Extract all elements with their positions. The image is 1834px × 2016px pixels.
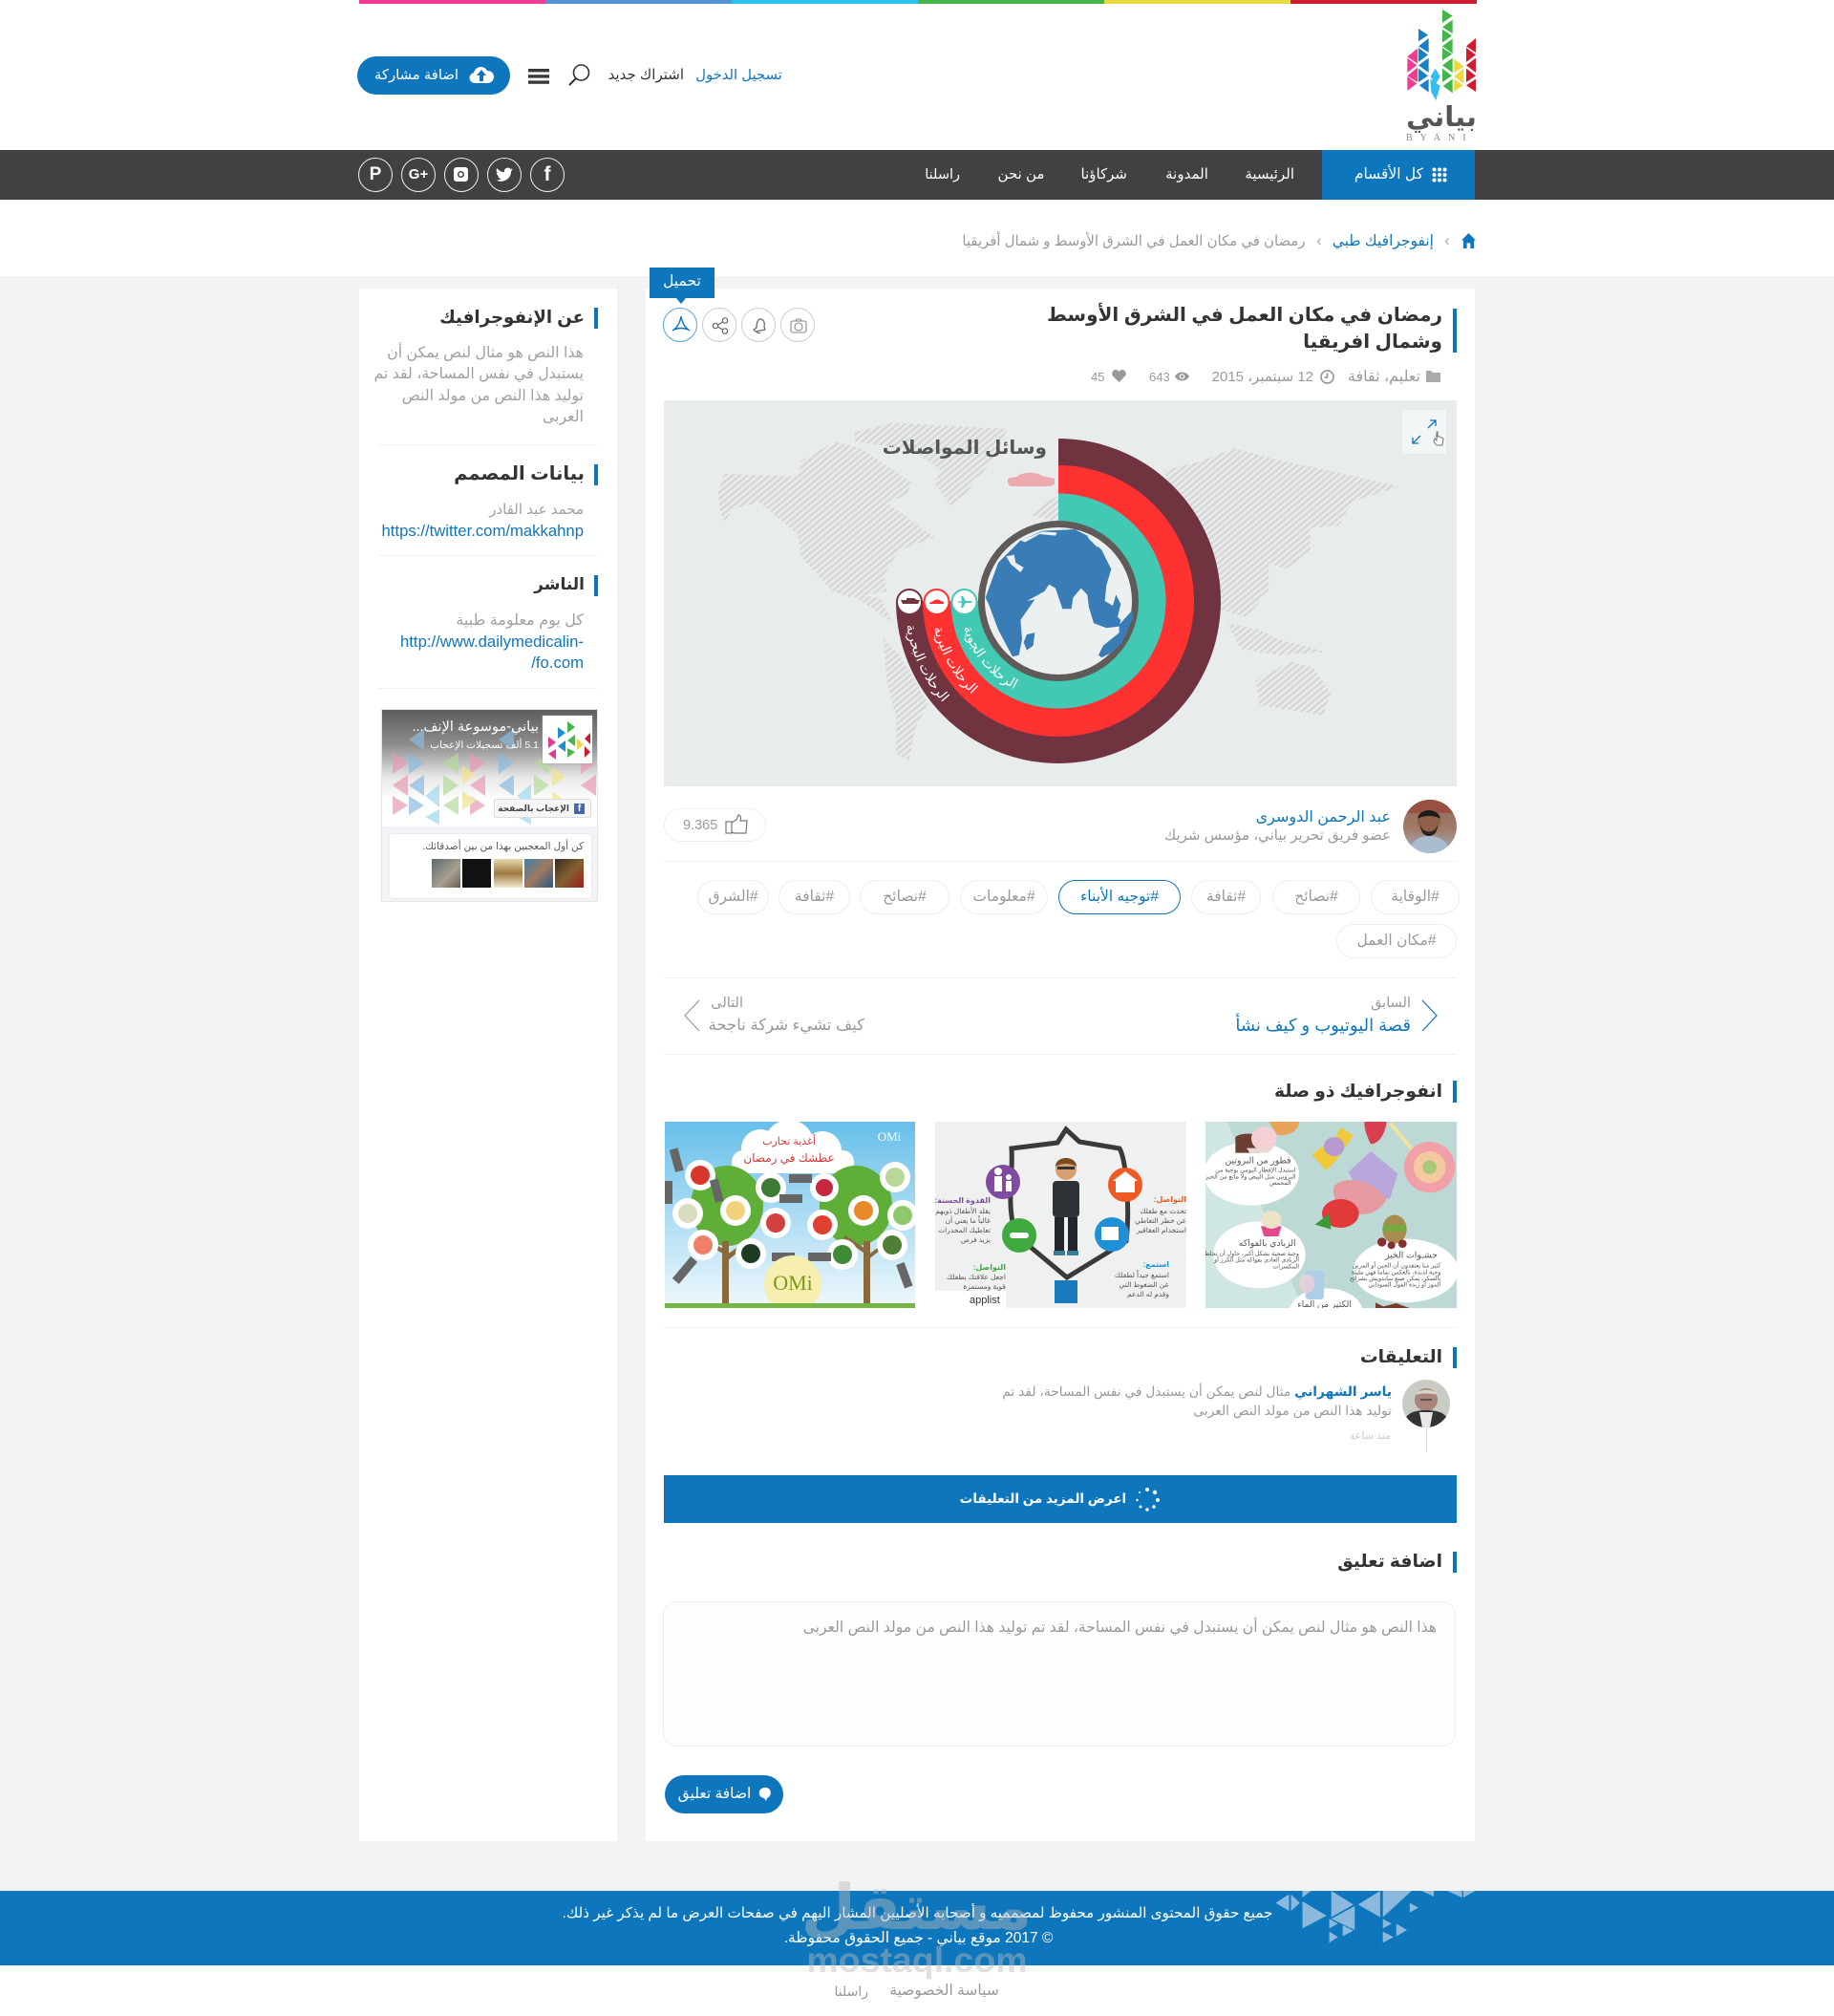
add comment button [665,1775,783,1813]
watermark latin word: mostaql.com [806,1940,1028,1980]
author block [664,800,1457,853]
about text: توليد هذا النص من مولد النص [402,388,584,404]
download tooltip [650,268,714,304]
thumbnail: foods fighting thirst [665,1122,915,1308]
tags [697,880,1460,958]
icon: grid [1433,168,1446,182]
thumbnail: healthy ramadan snacks: بالسكر، يمكن صنع ساندويش بشرائح [1350,1276,1441,1282]
thumbnail: teen protection: تعاطيك المخدرات [938,1226,991,1234]
icon: google plus: G+ [409,166,428,182]
about text [373,342,584,425]
globe [978,521,1139,681]
thumbnail: healthy ramadan snacks: البروتين مثل البيض ولا مانع من الخبز [1205,1173,1296,1180]
comment time: منذ ساعة [1350,1430,1391,1442]
footer link: privacy: سياسة الخصوصية [889,1983,999,1999]
likes count: 45 [1091,370,1104,384]
facebook widget [381,709,598,902]
icon: speech bubble [758,1787,771,1801]
breadcrumb category link: إنفوجرافيك طبي [1333,233,1434,249]
textarea placeholder: هذا النص هو مثال لنص يمكن أن يستبدل في نفس المساحة، لقد تم توليد هذا النص من مولد النص العربى [803,1619,1437,1636]
icon: right chevron [1421,999,1438,1032]
tag: highlighted [1058,880,1181,914]
copyright line: جميع حقوق المحتوى المنشور محفوظ لمصمميه و أصحابه الأصليين المشار اليهم في صفحات العرض ما لم يذكر غير ذلك. [563,1905,1272,1921]
footer link: contact: راسلنا [834,1984,868,1999]
tag: #الوقاية [1391,889,1439,905]
navigation bar [0,150,1834,200]
tag [860,880,949,914]
tag [778,880,850,914]
icon: menu [528,69,549,84]
thumbnail: teen protection: تحدث مع طفلك [1140,1207,1186,1215]
breadcrumb current page: رمضان في مكان العمل في الشرق الأوسط و شمال أفريقيا [962,234,1306,249]
login link: تسجيل الدخول [695,68,782,83]
article title: وشمال افريقيا [1303,332,1442,353]
heading: about infographic: عن الإنفوجرافيك [439,308,585,327]
thumbnail: teen protection: التواصل: [973,1263,1006,1272]
about text: العربى [543,409,584,425]
previous / next navigation [684,996,1438,1036]
designer link: https://twitter.com/makkahnp [382,522,584,540]
thumbnail: teen protection: يزيد فرص [961,1235,991,1244]
heading accent [594,464,598,485]
views count: 643 [1149,370,1170,384]
breadcrumb chevron: ‹ [1316,231,1322,249]
cap: ship [897,590,922,614]
tag: #ثقافة [1206,889,1246,905]
button label: اضافة تعليق [678,1786,751,1802]
commenter avatar [1402,1380,1450,1427]
facebook cover image [382,710,598,826]
icon: heart [1112,370,1126,382]
cap: car [925,590,949,614]
next caption: التالى [711,996,743,1011]
icon: share [702,308,736,342]
publisher link: /fo.com [531,654,584,672]
publisher link [400,633,584,672]
publisher name: كل يوم معلومة طبية [456,612,584,629]
label: land trips: الرحلات البرية [933,628,978,694]
icon: pdf download [663,308,697,342]
heading accent [594,575,598,596]
facebook like button: f [578,804,581,814]
thumbnail: teen protection: اجعل علاقتك بطفلك [947,1273,1006,1281]
comment [1002,1380,1450,1452]
page thumbnail logo [543,716,592,763]
tag: #ثقافة [795,889,834,905]
icon: instagram [444,158,479,192]
thumbnail: teen protection: عن خطر التعاطي [1135,1216,1186,1225]
article meta [1091,369,1440,385]
icon: eye [1175,373,1189,380]
comment text [1002,1383,1392,1418]
breadcrumb [962,231,1476,249]
publisher link: http://www.dailymedicalin- [400,633,584,651]
icon: pinterest [358,158,393,192]
tag [1272,880,1360,914]
heading accent [1453,1552,1457,1573]
button label: اضافة مشاركة [374,68,458,83]
thumbnail: teen protection: قوية ومستمرة [963,1282,1006,1291]
article title: رمضان في مكان العمل في الشرق الأوسط [1047,305,1442,326]
logo: Byani: بياني [1406,102,1477,133]
heading accent [1453,1347,1457,1368]
about text: يستبدل في نفس المساحة، لقد تم [373,366,584,382]
thumbnail: teen protection: وقدم له الدعم [1127,1290,1169,1298]
tag: highlighted: #توجيه الأبناء [1080,889,1159,905]
ring caps [897,590,976,614]
heading accent [1453,1081,1457,1103]
icon: notification [741,308,776,342]
nav link: home: الرئيسية [1245,166,1294,182]
icon: left chevron [684,999,699,1032]
nav link: partners: شركاؤنا [1080,166,1127,182]
heading: comments: التعليقات [1360,1346,1442,1366]
ring: land trips [923,465,1194,737]
thumbnail: foods fighting thirst: OMi [773,1271,813,1295]
tag [1371,880,1460,914]
ring: air trips [951,493,1165,709]
facebook like button: الإعجاب بالصفحة [498,804,569,813]
friends card [390,834,591,898]
thumbnail: healthy ramadan snacks: فطور من البروتين [1226,1156,1291,1166]
icon: twitter [487,158,522,192]
comment text: ياسر الشهراني مثال لنص يمكن أن يستبدل في نفس المساحة، لقد تم [1002,1384,1392,1399]
thumbnail: foods fighting thirst: أغذية تحارب [762,1134,816,1147]
top rainbow strip [359,0,1477,4]
thumbnail: teen protection: عن الضغوط التي [1119,1280,1169,1289]
button label: اعرض المزيد من التعليقات [960,1491,1126,1506]
facebook likes count: 5.1 ألف تسجيلات الإعجاب [430,740,539,751]
ring: sea trips [896,439,1221,763]
thumbnail: healthy ramadan snacks: الزبادي العادي بفواكه مثل الكرز أو [1213,1255,1299,1264]
tag: #نصائح [1294,889,1338,905]
previous link [1235,996,1438,1036]
icon: folder [1426,371,1440,382]
categories: تعليم، ثقافة [1348,369,1420,385]
tag: #نصائح [883,889,927,905]
tag [697,880,769,914]
related thumbnails [665,1122,1457,1308]
thumbnail: healthy ramadan snacks: المحمص [1269,1180,1291,1187]
icon: pinterest: P [370,164,381,184]
comment text: توليد هذا النص من مولد النص العربى [1193,1404,1392,1418]
icon: car [1008,473,1055,486]
designer name: محمد عبد القادر [489,502,584,518]
tab label: كل الأقسام [1354,166,1423,182]
icon: clock [1320,370,1334,384]
heading: related infographics: انفوجرافيك ذو صلة [1274,1081,1442,1101]
icon: thumbs up [725,814,748,834]
tag: #الشرق [708,889,758,905]
thumbnail: healthy ramadan snacks: وجبة صحية بشكل أكبر، حاول أن تخلط [1205,1249,1299,1257]
thumbnail: teen protection [935,1122,1186,1308]
register link: اشتراك جديد [608,67,684,83]
logo: Byani [1406,10,1477,143]
thumbnail: healthy ramadan snacks: استبدل الإفطار اليومي بوجبة من [1215,1168,1296,1174]
heading accent [594,308,598,329]
previous title: قصة اليوتيوب و كيف نشأ [1235,1016,1411,1035]
footer band [0,1891,1834,1965]
panel: sidebar [359,289,617,1841]
like button [664,808,766,842]
icon: cloud upload [470,67,494,83]
facebook page name: بياني-موسوعة الإنف... [412,719,539,735]
panel: main article [646,289,1475,1841]
mostaql watermark [801,1872,1032,1980]
icon: spinner [1136,1488,1160,1512]
icon: facebook: f [544,163,550,185]
icon: home [1461,233,1476,248]
tag [1191,880,1261,914]
thumbnail: healthy ramadan snacks: الموز أو زبدة الفول السوداني [1368,1280,1441,1289]
thumbnail: healthy ramadan snacks: الزبادي بالفواكه [1239,1238,1296,1248]
heading: publisher: الناشر [534,575,585,593]
watermark arabic word: مستقل [801,1872,1032,1942]
previous caption: السابق [1371,996,1411,1011]
thumbnail: teen protection: استمع: [1143,1260,1169,1269]
next link [684,996,864,1034]
social icons [358,158,565,192]
tag [960,880,1048,914]
thumbnail: teen protection: applist [970,1295,1000,1306]
label: air trips: الرحلات الجوية [964,627,1018,689]
heading: add comment: اضافة تعليق [1337,1551,1442,1571]
heading: designer data: بيانات المصمم [454,463,585,484]
download tooltip: تحميل [663,273,701,290]
friends caption: كن أول المعجبين بهذا من بين أصدقائك. [422,841,584,852]
facebook like button [494,799,591,818]
thumbnail: teen protection: يقلد الأطفال ذويهم [935,1206,991,1215]
icon: search [568,64,590,86]
infographic preview: transport [664,400,1457,786]
nav link: about: من نحن [998,166,1044,182]
thumbnail: healthy ramadan snacks: حشـوات الخبز [1384,1251,1438,1260]
article title [1047,302,1442,353]
date: 12 سبتمبر، 2015 [1212,369,1313,385]
breadcrumb chevron: ‹ [1444,231,1450,249]
author role: عضو فريق تحرير بياني، مؤسس شريك [1164,827,1391,844]
thumbnail: healthy ramadan snacks: المكسرات [1272,1263,1299,1270]
ring labels [906,626,1018,701]
tag: #معلومات [972,889,1035,905]
copyright year line: © 2017 موقع بياني - جميع الحقوق محفوظة. [784,1930,1053,1946]
thumbnail: foods fighting thirst: OMi [878,1129,902,1144]
all categories tab [1322,150,1475,200]
thumbnail: healthy ramadan snacks [1205,1122,1457,1308]
thumbnail: teen protection: القدوة الحسنة: [935,1196,991,1205]
cap: plane [951,590,976,614]
footer triangle pattern [1276,1891,1475,1943]
chart title: وسائل المواصلات [883,438,1047,459]
icon: facebook [530,158,565,192]
next title: كيف تشيء شركة ناجحة [709,1017,864,1034]
logo: Byani: BYANI [1406,133,1474,143]
about text: هذا النص هو مثال لنص يمكن أن [387,345,584,361]
comment textarea [663,1601,1456,1747]
like count: 9.365 [683,818,717,833]
icon: camera [780,308,815,342]
thumbnail: teen protection: استخدام العقاقير [1136,1226,1186,1234]
world map hatch [718,422,1399,761]
icon: google plus [401,158,436,192]
thumbnail: healthy ramadan snacks: كثير منا يعتقدون أن الجبن أو المربى [1353,1261,1441,1270]
expand button [1402,410,1446,454]
thumbnail: teen protection: استمع جيداً لطفلك [1115,1269,1169,1279]
action icons [663,308,815,342]
load more comments button [664,1475,1457,1523]
nav link: contact: راسلنا [925,167,960,182]
thumbnail: foods fighting thirst: عطشك في رمضان [743,1151,835,1166]
friends avatars [432,859,584,888]
label: sea trips: الرحلات البحرية [906,626,949,701]
author name: عبد الرحمن الدوسرى [1256,809,1391,826]
title accent [1453,309,1457,353]
thumbnail: teen protection: غالباً ما يعني أن [946,1214,991,1225]
thumbnail: teen protection: التواصل: [1154,1195,1186,1204]
add post button [357,56,510,95]
tag: #مكان العمل [1356,933,1437,949]
tag [1336,924,1457,958]
nav link: blog: المدونة [1165,166,1208,182]
author avatar [1403,800,1457,853]
thumbnail: healthy ramadan snacks: وجبة لذيذة، بالعكس تماما فهي مليئة [1352,1269,1440,1276]
